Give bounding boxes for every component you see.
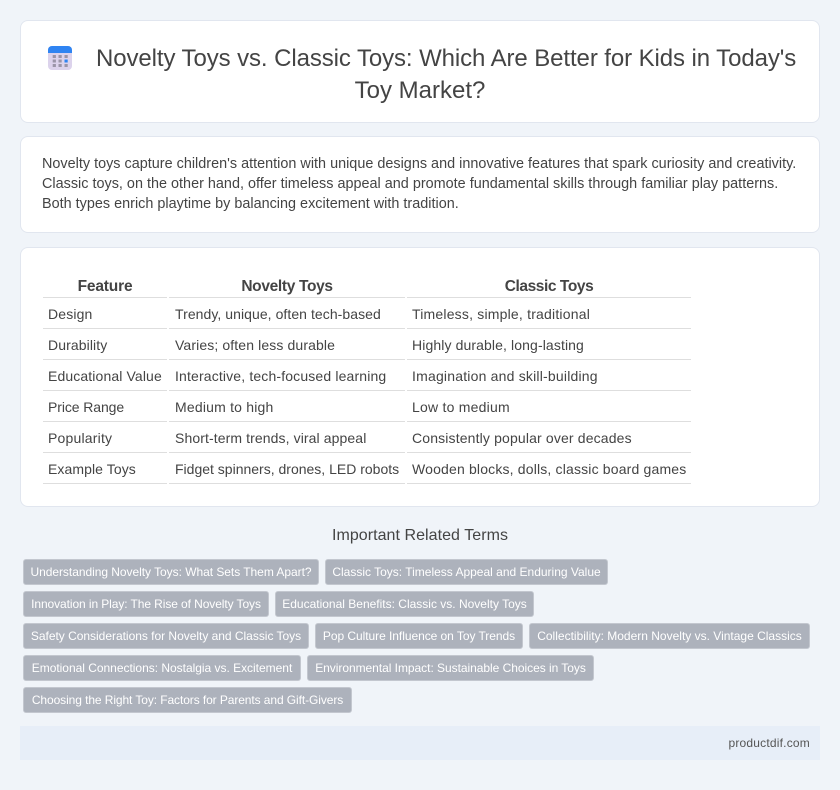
title: Toy Market?: [355, 77, 485, 104]
row: durability: Durability: [48, 337, 107, 353]
table header: Feature: [78, 278, 132, 295]
table header: Classic Toys: [505, 278, 593, 295]
row: popularity: Short-term trends, viral appeal: [175, 430, 366, 446]
table header: [78, 278, 594, 295]
row: popularity: Popularity: [48, 430, 112, 446]
footer bar: [20, 726, 820, 760]
tag: [23, 559, 319, 584]
row: example toys: Wooden blocks, dolls, classic board games: [412, 461, 686, 477]
row: durability: Varies; often less durable: [175, 337, 335, 353]
row: example toys: [48, 461, 686, 477]
heading: important related terms: Important Related Terms: [332, 527, 508, 544]
tag: Classic Toys: Timeless Appeal and Enduring Value: [332, 565, 601, 579]
intro text: Novelty toys capture children's attention with unique designs and innovative features that spark curiosity and creativity.: [42, 156, 796, 172]
table header: Novelty Toys: [241, 278, 333, 295]
tag: [23, 687, 352, 712]
row: educational value: Educational Value: [48, 368, 162, 384]
title: Novelty Toys vs. Classic Toys: Which Are Better for Kids in Today's: [96, 45, 796, 72]
tag: Emotional Connections: Nostalgia vs. Excitement: [32, 661, 292, 675]
row: durability: [48, 337, 584, 353]
row: educational value: Imagination and skill-building: [412, 368, 598, 384]
tag: Educational Benefits: Classic vs. Novelty Toys: [282, 597, 527, 611]
tag: Choosing the Right Toy: Factors for Parents and Gift-Givers: [32, 693, 343, 707]
tag: Environmental Impact: Sustainable Choices in Toys: [315, 661, 586, 675]
tag: [529, 623, 810, 648]
tag: [23, 623, 309, 648]
row: price range: [48, 399, 510, 415]
tag: Innovation in Play: The Rise of Novelty Toys: [31, 597, 261, 611]
row: educational value: Interactive, tech-focused learning: [175, 368, 386, 384]
tag: Pop Culture Influence on Toy Trends: [323, 629, 515, 643]
tag: [23, 655, 301, 680]
tag: Safety Considerations for Novelty and Classic Toys: [31, 629, 301, 643]
intro text: [42, 156, 796, 212]
row: example toys: Fidget spinners, drones, LED robots: [175, 461, 399, 477]
icon: calendar: [48, 46, 72, 70]
row: design: Timeless, simple, traditional: [412, 306, 590, 322]
related terms tags: [23, 559, 810, 713]
row: design: Trendy, unique, often tech-based: [175, 306, 381, 322]
tag: [315, 623, 523, 648]
row: design: Design: [48, 306, 92, 322]
row: price range: Medium to high: [175, 399, 274, 415]
panel: title card: [20, 20, 820, 123]
row: example toys: Example Toys: [48, 461, 136, 477]
row: popularity: [48, 430, 632, 446]
row: educational value: [48, 368, 598, 384]
comparison table: [43, 278, 691, 484]
row: popularity: Consistently popular over decades: [412, 430, 632, 446]
intro text: Classic toys, on the other hand, offer timeless appeal and promote fundamental skills through familiar play patterns.: [42, 176, 778, 192]
panel: introduction: [20, 136, 820, 233]
row: price range: Price Range: [48, 399, 124, 415]
row: price range: Low to medium: [412, 399, 510, 415]
title: [96, 45, 796, 104]
footer text: productdif.com: [728, 736, 810, 750]
intro text: Both types enrich playtime by balancing excitement with tradition.: [42, 196, 459, 212]
tag: [275, 591, 534, 616]
row: durability: Highly durable, long-lasting: [412, 337, 584, 353]
tag: [307, 655, 594, 680]
panel: comparison table: [20, 247, 820, 507]
tag: [325, 559, 608, 584]
tag: [23, 591, 269, 616]
tag: Understanding Novelty Toys: What Sets Them Apart?: [30, 565, 312, 579]
tag: Collectibility: Modern Novelty vs. Vintage Classics: [537, 629, 802, 643]
row: design: [48, 306, 590, 322]
